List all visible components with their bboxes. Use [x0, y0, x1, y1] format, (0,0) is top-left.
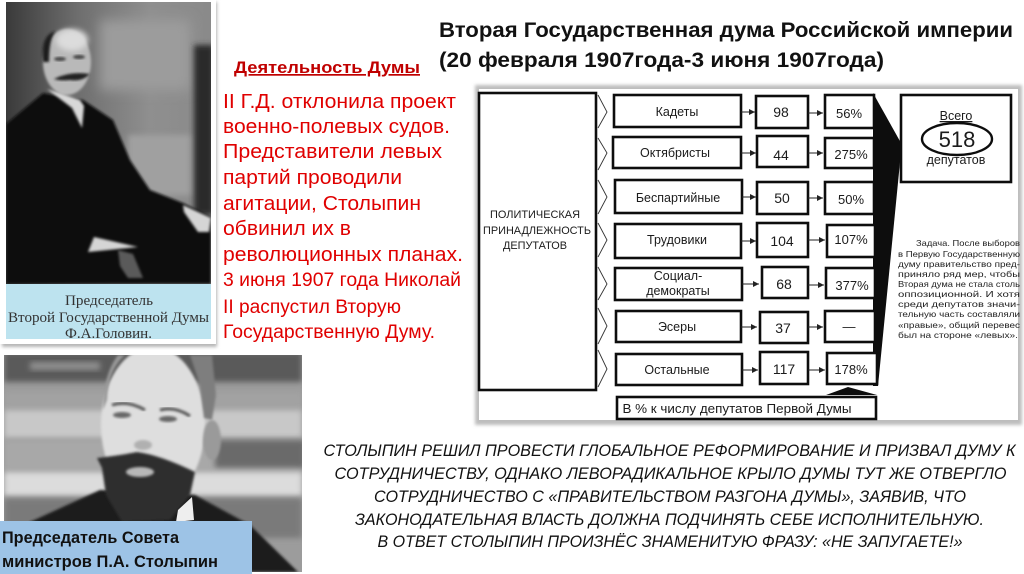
- box: political affiliation: [479, 93, 596, 390]
- text block: Stolypin reform: СОТРУДНИЧЕСТВУ, ОДНАКО ЛЕВОРАДИКАЛЬНОЕ КРЫЛО ДУМЫ ТУТ ЖЕ ОТВЕРГЛО: [334, 464, 1006, 483]
- title: [439, 18, 1013, 72]
- caption: Stolypin: министров П.А. Столыпин: [2, 552, 218, 571]
- text block: task: Вторая дума не стала столь: [898, 279, 1021, 289]
- text block: activity description: Представители левых: [223, 141, 442, 163]
- text block: Stolypin reform: [324, 441, 1016, 551]
- text block: task: был на стороне «левых».: [898, 330, 1018, 340]
- portrait photo: Golovin: [6, 2, 214, 284]
- text block: activity description: военно-полевых судов.: [223, 116, 450, 138]
- total: 518 deputies: депутатов: [927, 153, 986, 167]
- text block: activity description: агитации, Столыпин: [223, 193, 421, 215]
- caption: Stolypin: Председатель Совета: [2, 528, 180, 547]
- text block: activity description: 3 июня 1907 года Николай: [223, 270, 461, 291]
- row: Кадеты: [614, 95, 874, 128]
- photo: Stolypin: [0, 347, 305, 574]
- text block: activity description: Государственную Думу.: [223, 322, 435, 343]
- row: Октябристы: 275%: [834, 147, 868, 162]
- title: Вторая Государственная дума Российской империи: [439, 18, 1013, 42]
- row: Трудовики: [615, 223, 875, 258]
- panel: deputies diagram: [475, 85, 1022, 425]
- text block: task: приняло ряд мер, чтобы: [898, 269, 1020, 279]
- row: Социал-демократы: демократы: [646, 284, 710, 298]
- row: Беспартийные: 50: [774, 190, 790, 206]
- photo panel: Golovin: [0, 0, 217, 347]
- text block: activity description: обвинил их в: [223, 218, 351, 240]
- text block: activity description: II распустил Вторую: [223, 297, 401, 318]
- text block: task: среди депутатов значи-: [898, 299, 1020, 309]
- text block: activity description: II Г.Д. отклонила проект: [223, 91, 456, 113]
- note box: percent of first Duma: [617, 387, 877, 419]
- text block: Stolypin reform: В ОТВЕТ СТОЛЫПИН ПРОИЗНЁС ЗНАМЕНИТУЮ ФРАЗУ: «НЕ ЗАПУГАЕТЕ!»: [378, 532, 962, 551]
- caption: Stolypin: [0, 521, 252, 574]
- text block: task: «правые», общий перевес: [898, 320, 1021, 330]
- row: Трудовики: 107%: [834, 232, 868, 247]
- row: Трудовики: Трудовики: [647, 233, 707, 247]
- text block: activity description: [223, 91, 463, 343]
- box: political affiliation: ПОЛИТИЧЕСКАЯ: [490, 209, 580, 221]
- row: Беспартийные: Беспартийные: [636, 191, 720, 205]
- row: Социал-демократы: 377%: [835, 278, 869, 293]
- row: Октябристы: Октябристы: [640, 146, 710, 160]
- row: Кадеты: 98: [773, 104, 789, 120]
- row: Социал-демократы: Социал-: [654, 269, 702, 283]
- text block: task: в Первую Государственную: [898, 249, 1021, 259]
- row: Остальные: 178%: [834, 362, 868, 377]
- text block: task: Задача. После выборов: [916, 238, 1021, 248]
- row: Эсеры: Эсеры: [658, 320, 696, 334]
- text block: task: [898, 238, 1021, 340]
- row: Социал-демократы: [615, 267, 875, 300]
- note box: percent of first Duma: В % к числу депутатов Первой Думы: [622, 402, 852, 416]
- row: Кадеты: Кадеты: [656, 105, 698, 119]
- caption: Golovin: Второй Государственной Думы: [8, 310, 209, 326]
- row: Октябристы: [613, 136, 874, 168]
- row: Трудовики: 104: [770, 233, 794, 249]
- row: Социал-демократы: 68: [776, 276, 792, 292]
- box: political affiliation: ДЕПУТАТОВ: [503, 240, 567, 252]
- row: Остальные: Остальные: [644, 363, 710, 377]
- caption: Golovin: Ф.А.Головин.: [65, 326, 152, 342]
- text block: Stolypin reform: СОТРУДНИЧЕСТВО С «ПРАВИТЕЛЬСТВОМ РАЗГОНА ДУМЫ», ЗАЯВИВ, ЧТО: [374, 487, 966, 506]
- text block: activity description: партий проводили: [223, 167, 402, 189]
- row: Беспартийные: [615, 180, 874, 214]
- text block: Stolypin reform: ЗАКОНОДАТЕЛЬНАЯ ВЛАСТЬ ДОЛЖНА ПОДЧИНЯТЬ СЕБЕ ИСПОЛНИТЕЛЬНУЮ.: [355, 510, 984, 529]
- row: Эсеры: 37: [775, 320, 791, 336]
- text block: task: тельную часть составляли: [898, 309, 1020, 319]
- row: Кадеты: 56%: [836, 106, 862, 121]
- row: Эсеры: [616, 311, 875, 343]
- row: Беспартийные: 50%: [838, 192, 864, 207]
- black wedge to total: [873, 93, 901, 386]
- text block: task: думу правительство пред-: [898, 259, 1020, 269]
- total: 518 deputies: 518: [939, 127, 975, 152]
- row: Эсеры: —: [842, 319, 856, 334]
- box: political affiliation: ПРИНАДЛЕЖНОСТЬ: [483, 225, 591, 237]
- text block: activity description: революционных планах.: [223, 244, 463, 266]
- chevrons: [598, 95, 607, 387]
- total: 518 deputies: [901, 95, 1011, 182]
- text block: task: оппозиционной. И хотя: [898, 289, 1021, 299]
- row: Остальные: [616, 352, 877, 385]
- row: Остальные: 117: [773, 361, 795, 377]
- caption: Golovin: Председатель: [65, 293, 153, 309]
- total: 518 deputies: Всего: [940, 109, 972, 123]
- caption: Golovin: [6, 284, 211, 342]
- title: (20 февраля 1907года-3 июня 1907года): [439, 48, 884, 72]
- heading: activity of the Duma: Деятельность Думы: [234, 58, 420, 77]
- row: Октябристы: 44: [773, 147, 789, 163]
